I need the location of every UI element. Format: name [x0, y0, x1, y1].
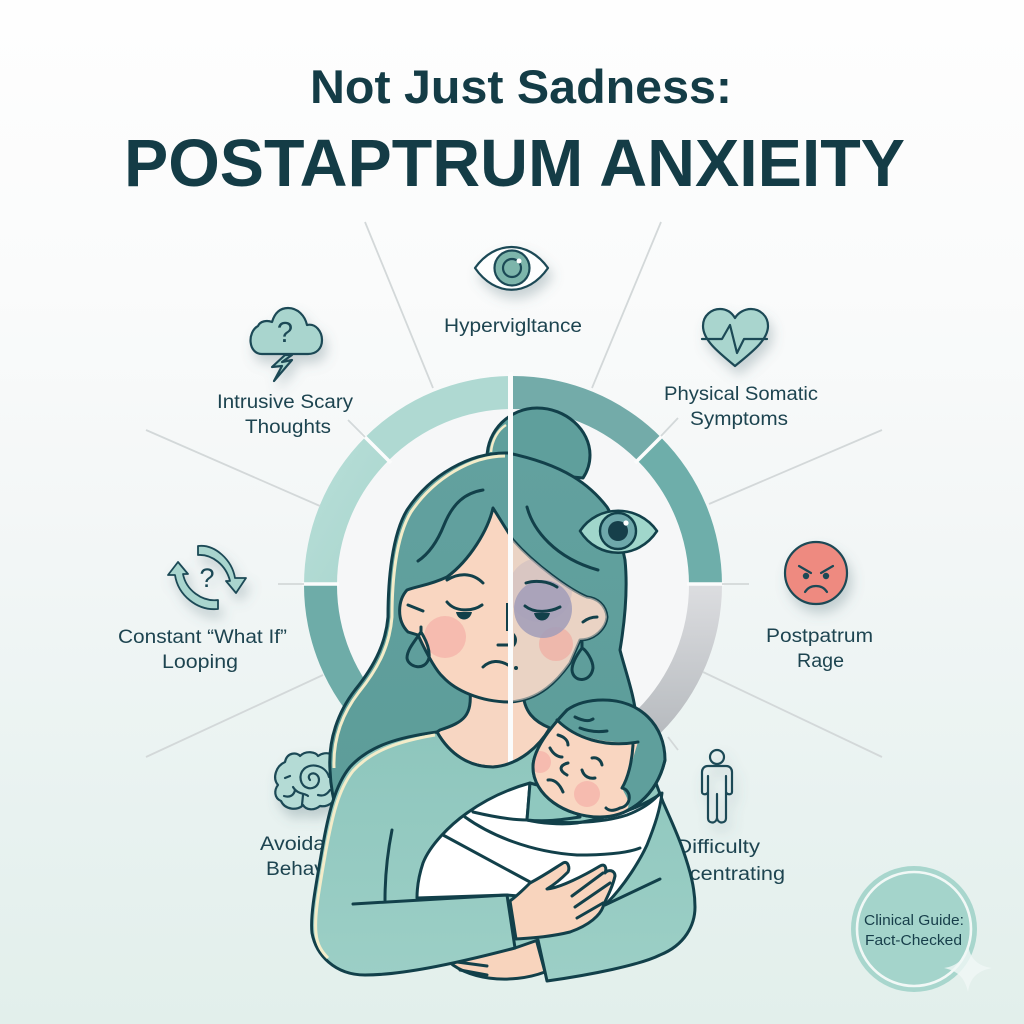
icon: looping arrows: [168, 546, 246, 609]
segmented ring chart: [302, 372, 724, 763]
sling wrap: [417, 783, 662, 903]
face: [400, 500, 611, 705]
item: difficulty concentrating: Difficulty: [676, 837, 761, 858]
badge: clinical guide fact-checked: Fact-Checked: [865, 933, 962, 949]
icon: sparkle: [944, 945, 992, 992]
item: avoidance behaviors: Avoidance: [260, 834, 360, 855]
item: what if looping: Looping: [162, 652, 238, 673]
item: avoidance behaviors: Behaviors: [266, 859, 358, 880]
resting sleeve edge: [353, 830, 660, 948]
icon: eye: [475, 247, 548, 290]
hair strands and fringe: [418, 490, 598, 570]
neck: [437, 690, 550, 767]
badge: clinical guide fact-checked: Clinical Guide:: [864, 913, 964, 929]
earrings: [407, 627, 593, 680]
hand: [510, 862, 615, 939]
icon: person outline: [702, 750, 732, 822]
item: intrusive scary thoughts: [217, 308, 354, 438]
item: physical somatic symptoms: Symptoms: [690, 409, 788, 430]
back hair: [330, 453, 640, 860]
item: postpartum rage: [766, 542, 873, 672]
icon: heart with pulse: [702, 309, 768, 366]
item: hypervigilance: Hypervigltance: [444, 316, 582, 337]
item: hypervigilance: [444, 247, 582, 337]
center split line: [508, 374, 513, 788]
title: [124, 60, 905, 201]
title: Not Just Sadness:: [310, 60, 732, 113]
icon: looping arrows: ?: [199, 563, 215, 593]
title: POSTAPTRUM ANXIEITY: [124, 126, 905, 201]
item: physical somatic symptoms: [664, 309, 818, 430]
item: difficulty concentrating: [650, 750, 785, 885]
icon: tangled brain: [275, 752, 340, 809]
item: intrusive scary thoughts: Thoughts: [245, 417, 331, 438]
icon: storm cloud with question mark: ?: [277, 317, 293, 349]
item: difficulty concentrating: Concentrating: [650, 864, 785, 885]
baby: [529, 700, 665, 817]
item: what if looping: Constant “What If”: [118, 627, 287, 648]
item: avoidance behaviors: [260, 752, 360, 880]
torso and arms: [312, 728, 695, 981]
item: postpartum rage: Rage: [797, 651, 844, 672]
icon: angry face: [785, 542, 847, 604]
lower forearm: [445, 935, 545, 979]
item: postpartum rage: Postpatrum: [766, 626, 873, 647]
hair bun: [487, 408, 590, 478]
floating eye on hair: [580, 511, 657, 553]
badge: clinical guide fact-checked: [851, 866, 992, 992]
radial divider lines: [146, 222, 882, 757]
item: physical somatic symptoms: Physical Somatic: [664, 384, 818, 405]
item: intrusive scary thoughts: Intrusive Scary: [217, 392, 354, 413]
item: what if looping: [118, 546, 287, 673]
illustration: mother holding baby: [312, 374, 695, 981]
